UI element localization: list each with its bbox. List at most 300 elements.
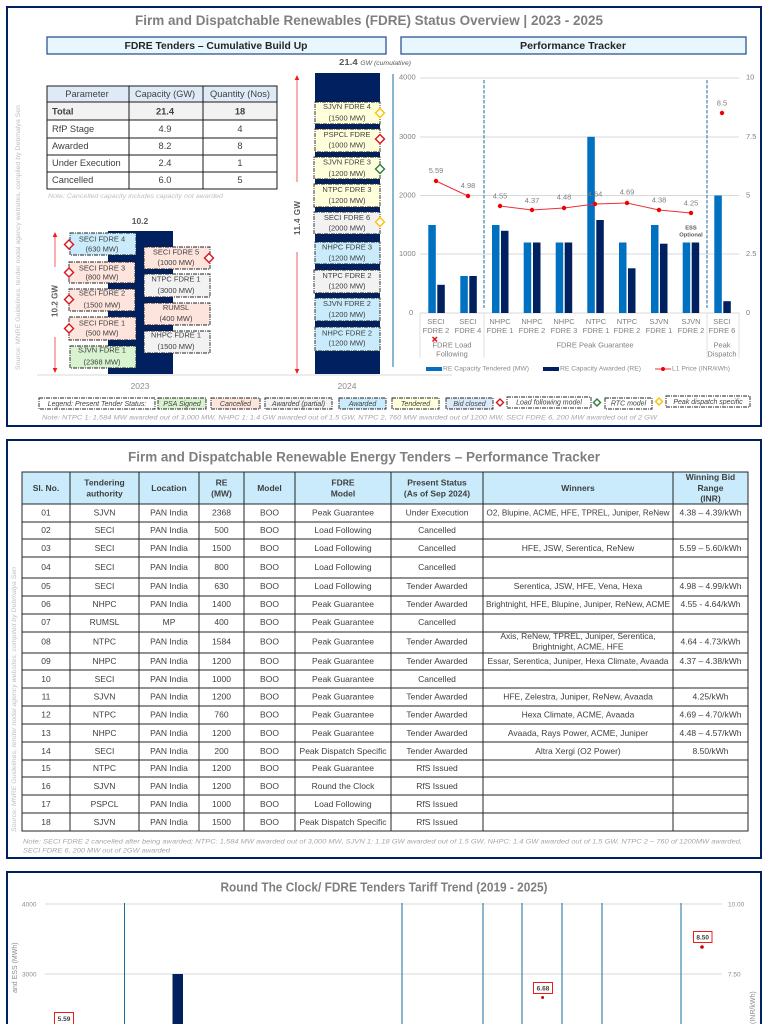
- row 09: NHPC: [92, 656, 117, 666]
- table header: Winning Bid: [686, 472, 735, 482]
- table footnote: Note: SECI FDRE 2 cancelled after being awarded; NTPC: 1,584 MW awarded out of 3,000 MW, SJVN 1: 1.18 GW awarded out of 1.5 GW, NHPC: 1.4 GW awarded out of 1.5 GW, NTPC 2 – 760 of 1200MW awarded,: [23, 838, 742, 846]
- category labels: NHPC: [521, 317, 543, 326]
- row 05: BOO: [260, 581, 279, 591]
- row 14: Altra Xergi (O2 Power): [535, 746, 621, 756]
- tender cards 2023: RUMSL: [163, 303, 189, 312]
- table note: Note: Cancelled capacity includes capacity not awarded: [48, 193, 223, 200]
- arrow: 10.2 GW height: 10.2 GW: [50, 285, 60, 317]
- tender cards 2024: (1200 MW): [328, 196, 366, 205]
- row 11: SJVN: [94, 692, 115, 702]
- row 01: 4.38 – 4.39/kWh: [680, 508, 742, 518]
- axes and gridlines: 1000: [399, 249, 416, 258]
- row 16: 16: [41, 781, 51, 791]
- row 09: Tender Awarded: [406, 656, 468, 666]
- row 07: BOO: [260, 617, 279, 627]
- status legend: Cancelled: [220, 401, 252, 408]
- category labels: FDRE 2: [614, 326, 640, 335]
- row 01: Peak Guarantee: [312, 508, 374, 518]
- section heading: cumulative build up: [47, 37, 386, 54]
- row 14: [41, 746, 729, 756]
- price data labels: 4.25: [684, 198, 698, 208]
- row 10: PAN India: [150, 674, 188, 684]
- row 01: O2, Blupine, ACME, HFE, TPREL, Juniper, ReNew: [486, 508, 670, 518]
- row 02: [41, 525, 456, 535]
- row 11: 4.25/kWh: [693, 692, 729, 702]
- row 16: RfS Issued: [416, 781, 458, 791]
- price data labels: 4.64: [588, 190, 602, 198]
- row 11: Tender Awarded: [406, 692, 468, 702]
- row 18: 18: [41, 817, 51, 827]
- summary table: Cancelled: [52, 175, 93, 185]
- summary table: Capacity (GW): [135, 89, 195, 99]
- category labels: FDRE Peak Guarantee: [556, 340, 634, 350]
- tender cards 2024: (1200 MW): [328, 282, 366, 290]
- row 12: NTPC: [93, 710, 116, 720]
- tender cards 2023: SECI FDRE 2: [79, 288, 125, 298]
- row 14: 200: [214, 746, 229, 756]
- section heading: cumulative build up: FDRE Tenders – Cumulative Build Up: [124, 41, 308, 52]
- row 01: PAN India: [150, 508, 188, 518]
- row 13: Peak Guarantee: [312, 728, 374, 738]
- tender cards 2023: NTPC FDRE 1: [151, 274, 201, 284]
- row 15: 1200: [212, 763, 231, 773]
- row 05: PAN India: [150, 581, 188, 591]
- row 09: BOO: [260, 656, 279, 666]
- row 09: Peak Guarantee: [312, 656, 374, 666]
- row 05: 4.98 – 4.99/kWh: [680, 581, 742, 591]
- price data labels: [429, 98, 727, 208]
- table header: Tendering: [84, 478, 125, 488]
- axes and gridlines: 4000: [399, 72, 416, 82]
- row 05: Load Following: [314, 581, 372, 591]
- tariff tag 8.50: 8.50: [696, 934, 709, 942]
- summary table: 21.4: [156, 106, 175, 116]
- chart legend: [426, 366, 730, 372]
- row 13: 4.48 – 4.57/kWh: [680, 728, 742, 738]
- category labels: SJVN: [681, 317, 701, 326]
- table header: Model: [331, 488, 355, 498]
- baseline: [37, 374, 452, 376]
- tender cards 2024: SJVN FDRE 2: [323, 299, 371, 308]
- row 03: PAN India: [150, 543, 188, 553]
- bar: capacity: [172, 974, 183, 1024]
- stacked bar: 2023: 2023: [131, 381, 150, 391]
- row 17: BOO: [260, 799, 279, 809]
- axes and gridlines: 2000: [399, 190, 416, 200]
- row 13: [41, 728, 742, 738]
- row 08: [41, 631, 741, 652]
- row 16: BOO: [260, 781, 279, 791]
- row 11: BOO: [260, 692, 279, 702]
- panel: performance tracker table: [7, 440, 761, 858]
- tender cards 2024: (1200 MW): [328, 310, 366, 319]
- category labels: FDRE 1: [646, 326, 672, 335]
- title: Firm and Dispatchable Renewable Energy Tenders – Performance Tracker: [128, 450, 601, 464]
- axes and gridlines: 5: [746, 190, 750, 200]
- summary table: Parameter: [65, 89, 109, 99]
- price data labels: 8.5: [717, 98, 727, 108]
- chart legend: RE Capacity Tendered (MW): [443, 366, 529, 372]
- row 11: Peak Guarantee: [312, 692, 374, 702]
- axes and gridlines: [12, 902, 757, 1024]
- tender cards 2023: SECI FDRE 1: [79, 318, 125, 328]
- row 07: Cancelled: [418, 617, 456, 627]
- source credit: Source: MNRE Guidelines, tender nodal agency websites, compiled by Debmalya Sen: [15, 105, 22, 370]
- row 16: [41, 781, 458, 791]
- row 07: RUMSL: [90, 617, 120, 627]
- price data labels: 4.55: [493, 192, 507, 200]
- arrow: 10.2 GW height: [50, 232, 60, 373]
- bars: capacity tendered: [428, 137, 722, 313]
- row 05: 05: [41, 581, 51, 591]
- axes and gridlines: 7.50: [728, 972, 741, 978]
- price data labels: 4.69: [620, 188, 634, 196]
- row 05: Serentica, JSW, HFE, Vena, Hexa: [514, 581, 643, 591]
- row 08: 1584: [212, 636, 231, 646]
- table header: Model: [257, 483, 282, 493]
- row 14: Peak Dispatch Specific: [300, 746, 387, 756]
- price data labels: 5.59: [429, 166, 443, 175]
- category labels: FDRE 6: [709, 326, 735, 335]
- row 01: 2368: [212, 508, 231, 518]
- row 07: 400: [214, 617, 229, 627]
- category labels: Following: [436, 350, 468, 358]
- tender cards 2024: (1500 MW): [328, 114, 366, 122]
- row 03: Load Following: [314, 543, 372, 553]
- summary table: RfP Stage: [52, 124, 94, 134]
- row 12: BOO: [260, 710, 279, 720]
- row 10: [41, 674, 456, 684]
- category labels: FDRE 4: [455, 326, 481, 335]
- axes and gridlines: 0: [746, 308, 750, 317]
- row 02: 02: [41, 525, 51, 535]
- row 10: Peak Guarantee: [312, 674, 374, 684]
- row 15: PAN India: [150, 763, 188, 773]
- row 06: NHPC: [92, 599, 117, 609]
- line: L1 price: [429, 98, 727, 215]
- row 17: PSPCL: [91, 799, 119, 809]
- tender cards 2024: SECI FDRE 6: [324, 213, 370, 222]
- row 04: Cancelled: [418, 562, 456, 572]
- status legend: Bid closed: [453, 401, 487, 408]
- category labels: SECI: [427, 317, 445, 326]
- category labels: FDRE 2: [519, 326, 545, 335]
- category labels: FDRE 1: [583, 326, 609, 335]
- bars: capacity awarded: [437, 220, 731, 313]
- row 13: PAN India: [150, 728, 188, 738]
- row 13: 13: [41, 728, 51, 738]
- category labels: SECI: [713, 317, 731, 326]
- tender cards 2023: (2368 MW): [83, 358, 121, 366]
- row 16: 1200: [212, 781, 231, 791]
- period dividers: [124, 903, 681, 1024]
- row 17: RfS Issued: [416, 799, 458, 809]
- section heading: performance tracker: Performance Tracker: [520, 41, 626, 52]
- row 14: SECI: [95, 746, 114, 756]
- tariff point 6.68: [541, 996, 544, 999]
- row 17: PAN India: [150, 799, 188, 809]
- row 04: PAN India: [150, 562, 188, 572]
- row 12: PAN India: [150, 710, 188, 720]
- row 08: Tender Awarded: [406, 636, 468, 646]
- status legend: Awarded (partial): [271, 401, 325, 408]
- row 13: Tender Awarded: [406, 728, 468, 738]
- row 12: Peak Guarantee: [312, 710, 374, 720]
- tender cards 2023: (3000 MW): [157, 286, 195, 295]
- row 14: Tender Awarded: [406, 746, 468, 756]
- title: Round The Clock/ FDRE Tenders Tariff Trend (2019 - 2025): [220, 880, 548, 894]
- stacked bar: 2023: [50, 216, 214, 391]
- tender cards 2024: NHPC FDRE 2: [322, 328, 372, 338]
- axes and gridlines: 10: [746, 72, 754, 82]
- row 09: 1200: [212, 656, 231, 666]
- row 13: 1200: [212, 728, 231, 738]
- row 18: BOO: [260, 817, 279, 827]
- summary table: 8.2: [159, 141, 171, 151]
- table header: Sl. No.: [33, 483, 59, 493]
- status legend: Awarded: [348, 401, 377, 408]
- table header: [33, 472, 735, 504]
- tender cards 2023: (630 MW): [86, 244, 119, 254]
- category labels: Peak: [713, 340, 731, 350]
- row 05: Tender Awarded: [406, 581, 468, 591]
- summary table: 5: [237, 175, 243, 185]
- row 03: 5.59 – 5.60/kWh: [680, 543, 742, 553]
- axes and gridlines: (INR/kWh): [750, 991, 757, 1024]
- row 08: PAN India: [150, 636, 188, 646]
- row 08: BOO: [260, 636, 279, 646]
- tender cards 2023: SJVN FDRE 1: [78, 346, 126, 354]
- row 04: 800: [214, 562, 229, 572]
- row 09: 4.37 – 4.38/kWh: [680, 656, 742, 666]
- table footnote: [23, 838, 742, 854]
- row 09: Essar, Serentica, Juniper, Hexa Climate, Avaada: [488, 656, 669, 666]
- row 13: NHPC: [92, 728, 117, 738]
- category labels: SJVN: [649, 317, 669, 326]
- row 02: PAN India: [150, 525, 188, 535]
- tariff tag 6.68: [534, 982, 552, 994]
- row 02: SECI: [95, 525, 114, 535]
- tender cards 2023: (1500 MW): [83, 300, 121, 310]
- axes and gridlines: 3000: [399, 132, 416, 141]
- section heading: performance tracker: [401, 37, 746, 54]
- source credit: Source: MNRE Guidelines, tender nodal agency websites, compiled by Debmalya Sen: [11, 567, 18, 832]
- row 09: [41, 656, 742, 666]
- axes and gridlines: 4000: [22, 902, 37, 908]
- category labels: NTPC: [617, 317, 638, 326]
- summary table: Total: [52, 106, 74, 116]
- row 05: [41, 581, 742, 591]
- category labels: FDRE 2: [423, 326, 449, 335]
- row 03: SECI: [95, 543, 114, 553]
- row 13: Avaada, Rays Power, ACME, Juniper: [508, 728, 648, 738]
- stacked bar: 2024: 21.4 GW (cumulative): [339, 57, 411, 67]
- summary table: 6.0: [159, 175, 171, 185]
- row 18: [41, 817, 458, 827]
- table header: (INR): [700, 494, 721, 504]
- row 08: 4.64 - 4.73/kWh: [680, 636, 741, 646]
- row 11: PAN India: [150, 692, 188, 702]
- row 14: 14: [41, 746, 51, 756]
- row 02: Cancelled: [418, 525, 456, 535]
- icon: cancelled cross: [432, 337, 437, 342]
- callout: ESS optional: Optional: [679, 232, 703, 238]
- row 10: Cancelled: [418, 674, 456, 684]
- title: Firm and Dispatchable Renewables (FDRE) Status Overview | 2023 - 2025: [135, 12, 603, 28]
- tender cards 2024: SJVN FDRE 4: [323, 102, 371, 111]
- row 14: PAN India: [150, 746, 188, 756]
- row 06: Tender Awarded: [406, 599, 468, 609]
- callout: ESS optional: ESS: [685, 226, 697, 232]
- row 18: Peak Dispatch Specific: [300, 817, 387, 827]
- row 03: BOO: [260, 543, 279, 553]
- tariff tag 6.68: 6.68: [537, 986, 550, 992]
- table header: Winners: [561, 483, 595, 493]
- table header: (MW): [211, 488, 232, 498]
- arrow: 11.4 GW height: 11.4 GW: [293, 201, 302, 235]
- row 06: 06: [41, 599, 51, 609]
- tender cards 2023: (400 MW): [160, 314, 193, 323]
- row 07: MP: [163, 617, 176, 627]
- tariff tag 8.50: [694, 932, 712, 942]
- table header: (As of Sep 2024): [404, 488, 470, 498]
- row 06: BOO: [260, 599, 279, 609]
- tender cards 2023: SECI FDRE 5: [153, 248, 199, 256]
- row 01: Under Execution: [406, 508, 469, 518]
- stacked bar: 2024: 2024: [338, 381, 357, 391]
- row 04: BOO: [260, 562, 279, 572]
- price data labels: 4.38: [652, 196, 666, 204]
- row 01: BOO: [260, 508, 279, 518]
- summary table: Under Execution: [52, 158, 121, 168]
- summary table: [47, 86, 277, 189]
- category labels: [420, 313, 739, 358]
- row 12: Hexa Climate, ACME, Avaada: [522, 710, 635, 720]
- table header: Range: [698, 483, 724, 493]
- row 12: 4.69 – 4.70/kWh: [680, 710, 742, 720]
- tender cards 2024: (2000 MW): [328, 224, 366, 232]
- summary table: 18: [235, 106, 245, 116]
- row 01: 01: [41, 508, 51, 518]
- row 06: Peak Guarantee: [312, 599, 374, 609]
- row 16: SJVN: [94, 781, 115, 791]
- axes and gridlines: [399, 72, 756, 317]
- table header: FDRE: [331, 478, 355, 488]
- row 04: SECI: [95, 562, 114, 572]
- stacked bar: 2023: 10.2: [132, 216, 149, 226]
- tariff tag 5.59: [54, 1012, 74, 1024]
- row 10: 1000: [212, 674, 231, 684]
- row 08: Axis, ReNew, TPREL, Juniper, Serentica,: [500, 631, 656, 641]
- chart legend: RE Capacity Awarded (RE): [560, 366, 641, 372]
- row 02: BOO: [260, 525, 279, 535]
- row 12: Tender Awarded: [406, 710, 468, 720]
- price data labels: 4.37: [525, 196, 539, 205]
- axes and gridlines: 0: [409, 308, 413, 317]
- model markers 2024: [376, 108, 384, 226]
- category labels: FDRE 1: [487, 326, 513, 335]
- row 04: [41, 562, 456, 572]
- performance chart: [393, 72, 756, 372]
- status legend: Legend: Present Tender Status:: [48, 401, 146, 408]
- summary table: 2.4: [159, 158, 171, 168]
- table header: RE: [216, 478, 228, 488]
- row 03: 1500: [212, 543, 231, 553]
- tender cards 2023: (800 MW): [86, 272, 119, 282]
- category labels: NHPC: [553, 317, 575, 326]
- row 14: 8.50/kWh: [693, 746, 729, 756]
- tariff point 8.50: [700, 945, 704, 949]
- row 11: HFE, Zelestra, Juniper, ReNew, Avaada: [503, 692, 653, 702]
- stacked bar: 2024: [293, 57, 411, 391]
- tender cards 2024: (1200 MW): [328, 254, 366, 262]
- row 15: Peak Guarantee: [312, 763, 374, 773]
- tender cards 2023: SECI FDRE 4: [79, 234, 125, 244]
- tender cards 2024: NTPC FDRE 3: [322, 185, 372, 194]
- row 18: RfS Issued: [416, 817, 458, 827]
- tender cards 2023: (500 MW): [86, 328, 119, 338]
- category labels: NTPC: [586, 317, 607, 326]
- status legend: PSA Signed: [163, 401, 202, 408]
- row 02: Load Following: [314, 525, 372, 535]
- row 15: [41, 763, 458, 773]
- status legend: [39, 396, 750, 409]
- row 07: 07: [41, 617, 51, 627]
- summary table: 4: [237, 124, 243, 134]
- row 12: 760: [214, 710, 229, 720]
- tender cards 2024: [314, 102, 380, 351]
- axes and gridlines: 3000: [22, 972, 37, 978]
- row 18: SJVN: [94, 817, 115, 827]
- row 12: [41, 710, 742, 720]
- summary table: Quantity (Nos): [210, 89, 270, 99]
- axes and gridlines: 2.5: [746, 249, 756, 258]
- tender cards 2024: (1200 MW): [328, 169, 366, 178]
- category labels: SECI: [459, 317, 477, 326]
- table header: Present Status: [407, 478, 467, 488]
- axes and gridlines: 7.5: [746, 132, 756, 141]
- row 12: 12: [41, 710, 51, 720]
- row 11: [42, 692, 729, 702]
- status legend: Tendered: [401, 401, 431, 408]
- category labels: FDRE 3: [551, 326, 577, 335]
- summary table: 1: [237, 158, 243, 168]
- row 03: [41, 543, 742, 553]
- summary table: Awarded: [52, 141, 89, 151]
- category labels: Dispatch: [707, 350, 737, 358]
- row 10: 10: [41, 674, 51, 684]
- row 17: [41, 799, 458, 809]
- axes and gridlines: and ESS (MWh): [12, 942, 19, 993]
- row 04: Load Following: [314, 562, 372, 572]
- row 06: 4.55 - 4.64/kWh: [680, 599, 741, 609]
- row 15: 15: [41, 763, 51, 773]
- row 13: BOO: [260, 728, 279, 738]
- summary table: 8: [237, 141, 243, 151]
- row 16: Round the Clock: [312, 781, 375, 791]
- row 09: 09: [41, 656, 51, 666]
- tender cards 2024: PSPCL FDRE: [324, 130, 370, 139]
- tender cards 2024: (1000 MW): [328, 140, 366, 150]
- row 06: 1400: [212, 599, 231, 609]
- row 15: BOO: [260, 763, 279, 773]
- axes and gridlines: 10.00: [728, 902, 745, 908]
- row 01: SJVN: [94, 508, 115, 518]
- summary table: 4.9: [159, 124, 171, 134]
- load following markers 2023: [64, 240, 214, 333]
- row 11: 11: [42, 692, 51, 702]
- row 07: Peak Guarantee: [312, 617, 374, 627]
